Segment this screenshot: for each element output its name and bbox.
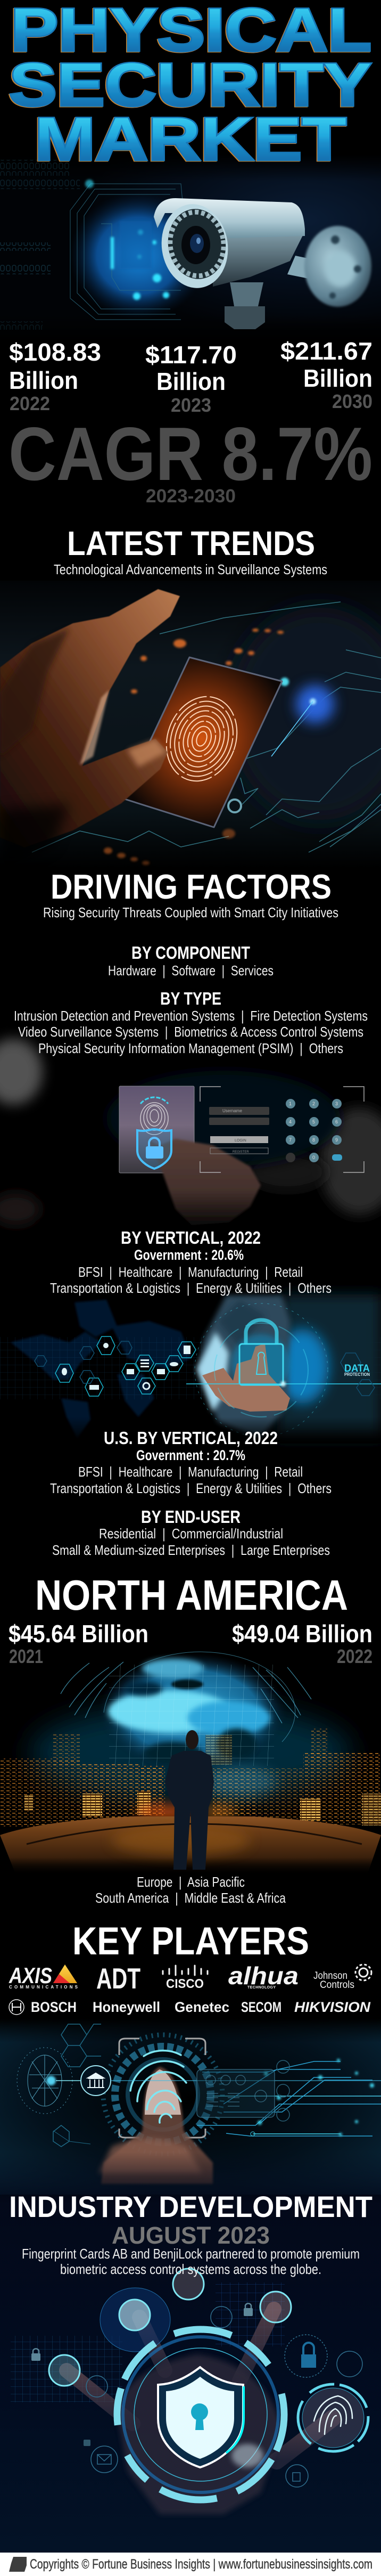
stat: North America 2022: 2022 bbox=[337, 1645, 372, 1667]
image: finger and login panel bbox=[0, 1039, 381, 1225]
camera lens bbox=[156, 200, 233, 292]
world map bbox=[11, 1300, 192, 1438]
finger scan circles bbox=[49, 2269, 291, 2386]
icons bbox=[86, 2306, 362, 2487]
segment: U.S. by vertical 2022 bbox=[50, 1428, 332, 1496]
segment: by vertical 2022: Government : 20.6% bbox=[134, 1247, 244, 1263]
segment: by end-user: BY END-USER bbox=[141, 1507, 241, 1527]
logo: Cisco bbox=[163, 1966, 208, 1991]
stat: North America 2021: 2021 bbox=[9, 1645, 43, 1667]
shield lock icon bbox=[137, 1129, 171, 1169]
segment: by type: BY TYPE bbox=[160, 989, 221, 1008]
security ring bbox=[117, 2329, 284, 2500]
globe bbox=[100, 2288, 170, 2352]
title: MARKET bbox=[35, 105, 346, 173]
lock icons bbox=[31, 2303, 316, 2446]
segment: by end-user: Residential | Commercial/Industrial bbox=[99, 1526, 283, 1542]
keypad bbox=[286, 1099, 342, 1162]
hex network bbox=[53, 2024, 101, 2147]
fist bbox=[148, 1139, 261, 1225]
development description bbox=[22, 2246, 360, 2277]
icon: Fortune Business Insights logo bbox=[9, 2557, 27, 2572]
hand palm and fingers bbox=[67, 2285, 333, 2461]
camera bracket bbox=[225, 282, 265, 329]
other regions list: South America | Middle East & Africa bbox=[95, 1890, 286, 1906]
bank icon bbox=[56, 2066, 111, 2096]
globe bbox=[61, 1652, 311, 1772]
logo: Johnson Controls bbox=[313, 1964, 371, 1991]
segment: by vertical 2022 bbox=[50, 1228, 332, 1296]
logo: Bosch bbox=[9, 1999, 77, 2015]
keypad: 5 bbox=[312, 1119, 315, 1124]
image: hand touching fingerprint scanner bbox=[0, 581, 381, 874]
man silhouette bbox=[165, 1730, 214, 1870]
industry development date: AUGUST 2023 bbox=[112, 2222, 270, 2249]
stat: 2022 market size: Billion bbox=[9, 366, 78, 394]
keypad: 4 bbox=[289, 1119, 292, 1124]
segment: U.S. by vertical 2022: U.S. BY VERTICAL, 2022 bbox=[104, 1428, 278, 1448]
heading: driving factors: DRIVING FACTORS bbox=[51, 867, 332, 906]
title: SECURITY bbox=[9, 51, 371, 119]
footer bar bbox=[0, 2553, 381, 2576]
other regions list: Europe | Asia Pacific bbox=[137, 1874, 245, 1890]
wall mount bbox=[287, 226, 371, 307]
logo: Dahua: alhua bbox=[228, 1962, 299, 1990]
keypad: 1 bbox=[289, 1101, 292, 1106]
fingerprint bbox=[155, 687, 249, 791]
scanning ring bbox=[103, 2035, 222, 2154]
logo: ADT: ADT bbox=[96, 1962, 140, 1995]
city skyline bbox=[0, 1729, 381, 1827]
development description: biometric access control systems across the globe. bbox=[60, 2261, 321, 2277]
logo: Cisco: CISCO bbox=[166, 1977, 204, 1991]
stat: 2023 market size: $117.70 bbox=[145, 341, 237, 369]
segment: by component: BY COMPONENT bbox=[131, 943, 250, 963]
stat: 2022 market size bbox=[9, 338, 101, 414]
body dark bbox=[277, 1294, 381, 1438]
fingerprint arcs bbox=[130, 2051, 186, 2123]
heading: latest trends: LATEST TRENDS bbox=[67, 524, 315, 563]
stat: 2030 market size bbox=[280, 337, 372, 412]
keypad: 7 bbox=[289, 1137, 292, 1143]
stat: 2023 market size: Billion bbox=[156, 368, 226, 395]
platform bbox=[0, 1816, 381, 1875]
title bbox=[9, 0, 371, 173]
keypad: 3 bbox=[335, 1101, 338, 1106]
camera shroud bbox=[154, 198, 305, 238]
image: data protection bbox=[0, 1294, 381, 1444]
login form: Username bbox=[222, 1108, 242, 1113]
stat: 2030 market size: 2030 bbox=[332, 390, 372, 412]
CAGR period: 2023-2030 bbox=[146, 486, 236, 507]
hexagon icons bbox=[35, 1336, 375, 1396]
logo: Bosch: BOSCH bbox=[31, 1999, 77, 2015]
logo: Axis: AXIS bbox=[9, 1963, 52, 1988]
segment: by component: Hardware | Software | Services bbox=[108, 963, 274, 979]
hand pointing bbox=[202, 1343, 290, 1412]
login form bbox=[200, 1087, 364, 1172]
logo: Honeywell: Honeywell bbox=[93, 1999, 160, 2015]
segment: by end-user bbox=[52, 1507, 330, 1558]
keypad: 0 bbox=[312, 1155, 315, 1160]
stat: 2023 market size bbox=[145, 341, 237, 416]
circuit lines bbox=[111, 2061, 381, 2136]
corner brackets bbox=[119, 2039, 205, 2138]
camera body bbox=[213, 234, 303, 287]
stat: North America 2021: $45.64 Billion bbox=[9, 1620, 148, 1648]
heading: key players: KEY PLAYERS bbox=[72, 1920, 309, 1963]
logo: Secom: SECOM bbox=[241, 1999, 281, 2015]
login form: REGISTER bbox=[233, 1151, 249, 1154]
segment: by type bbox=[14, 989, 368, 1056]
stat: 2022 market size: $108.83 bbox=[9, 338, 101, 366]
image: man facing globe over city bbox=[0, 1652, 381, 1875]
grids bbox=[11, 2282, 285, 2402]
stat: 2030 market size: $211.67 bbox=[280, 337, 372, 365]
face scan bbox=[17, 2048, 72, 2114]
logo: Dahua: TECHNOLOGY bbox=[247, 1986, 276, 1990]
sleeve and arm bbox=[197, 1295, 290, 1438]
image: biometric fingerprint and circuit bbox=[0, 2019, 381, 2195]
data protection label: DATA bbox=[344, 1363, 370, 1374]
image: hand with shield bbox=[0, 2152, 381, 2553]
keypad: 2 bbox=[312, 1101, 315, 1106]
phone scanner bbox=[123, 657, 282, 827]
logos: key players bbox=[9, 1962, 371, 2015]
stat: North America 2021 bbox=[9, 1620, 148, 1667]
hero image: security camera bbox=[0, 154, 381, 341]
stat: 2023 market size: 2023 bbox=[171, 394, 211, 416]
hand bbox=[0, 589, 180, 874]
keypad: 9 bbox=[335, 1137, 338, 1143]
logo: Genetec: Genetec bbox=[175, 1999, 229, 2015]
login form: LOGIN bbox=[235, 1139, 246, 1143]
glass fingerprint panel bbox=[119, 1086, 194, 1173]
logo: Johnson Controls: Controls bbox=[320, 1979, 354, 1991]
logo: Axis: COMMUNICATIONS bbox=[9, 1985, 78, 1990]
segment: by component bbox=[108, 943, 274, 979]
logo: Hikvision: HIKVISION bbox=[294, 1999, 371, 2015]
stat: North America 2022 bbox=[232, 1620, 372, 1667]
latest trends subtitle: Technological Advancements in Surveillance Systems bbox=[54, 561, 327, 577]
segment: U.S. by vertical 2022: BFSI | Healthcare | Manufacturing | Retail bbox=[78, 1464, 303, 1480]
padlock bbox=[195, 1303, 328, 1437]
segment: by vertical 2022: BFSI | Healthcare | Manufacturing | Retail bbox=[78, 1264, 303, 1280]
logo: Johnson Controls: Johnson bbox=[313, 1970, 347, 1982]
keypad: 6 bbox=[335, 1119, 338, 1124]
segment: U.S. by vertical 2022: Government : 20.7% bbox=[136, 1447, 245, 1463]
keypad: 8 bbox=[312, 1137, 315, 1143]
segment: by vertical 2022: BY VERTICAL, 2022 bbox=[121, 1228, 261, 1248]
scanner glow dot bbox=[271, 678, 334, 756]
shield bbox=[158, 2367, 244, 2467]
data protection label: PROTECTION bbox=[344, 1372, 370, 1377]
other regions list bbox=[95, 1874, 286, 1906]
chip panel bbox=[197, 2069, 275, 2117]
fingerprint circle bbox=[298, 2384, 368, 2451]
stat: 2022 market size: 2022 bbox=[10, 393, 50, 414]
finger bbox=[98, 2067, 213, 2184]
stat: 2030 market size: Billion bbox=[303, 364, 372, 392]
